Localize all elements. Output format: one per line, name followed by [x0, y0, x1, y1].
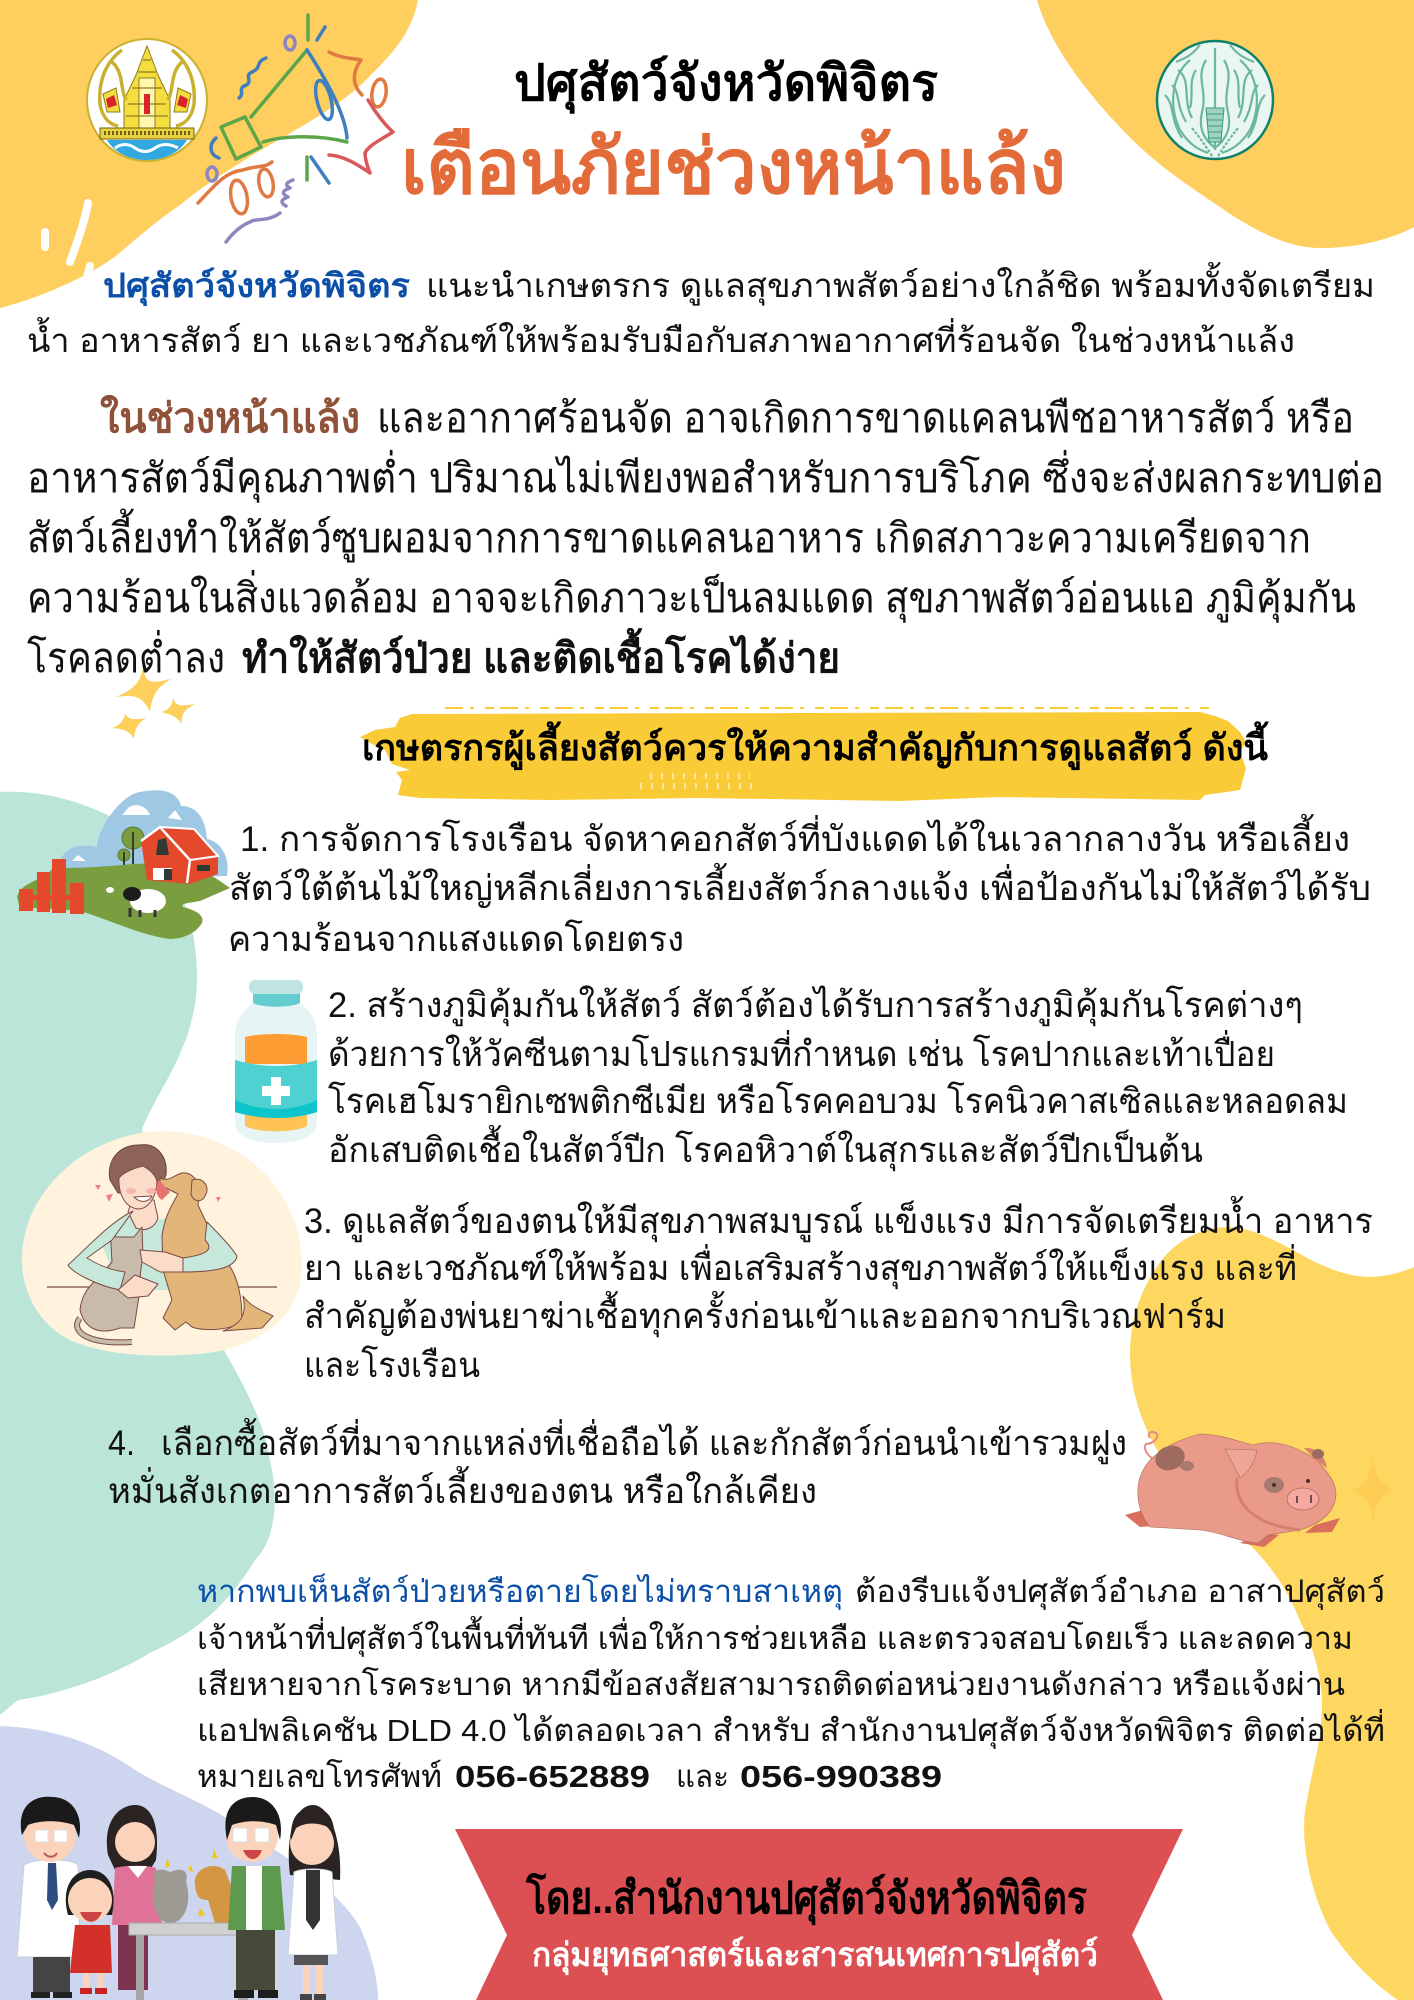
text block: item 2: โรคเฮโมรายิกเซพติกซีเมีย หรือโรคคอบวม โรคนิวคาสเซิลและหลอดลม	[328, 1081, 1348, 1121]
text block: item 1: 1. การจัดการโรงเรือน จัดหาคอกสัตว์ที่บังแดดได้ในเวลากลางวัน หรือเลี้ยง	[240, 813, 1350, 859]
icon: vaccine vial	[235, 980, 317, 1143]
text block: item 3: สำคัญต้องพ่นยาฆ่าเชื้อทุกครั้งก่อนเข้าและออกจากบริเวณฟาร์ม	[304, 1290, 1226, 1337]
background: left teal blob	[0, 792, 275, 1715]
table with cat and dog	[129, 1866, 261, 2000]
icon: provincial livestock office emblem	[1157, 41, 1273, 159]
text block: dry season effects: ทำให้สัตว์ป่วย และติดเชื้อโรคได้ง่าย	[242, 628, 840, 681]
text block: dry season effects: ในช่วงหน้าแล้ง	[100, 394, 360, 441]
illustration: farm with barn and sheep	[17, 790, 230, 939]
text block: intro paragraph	[27, 262, 1375, 359]
icon: sparkles	[112, 668, 195, 739]
doctor right	[288, 1805, 340, 2000]
text block: notice paragraph: 056-652889	[455, 1759, 650, 1794]
icon: faint sparkle	[1350, 1456, 1396, 1522]
text block: notice paragraph: และ	[676, 1759, 729, 1794]
text block: intro paragraph: แนะนำเกษตรกร ดูแลสุขภาพสัตว์อย่างใกล้ชิด พร้อมทั้งจัดเตรียม	[426, 262, 1375, 306]
icon: livestock department emblem	[87, 39, 207, 161]
text block: item 3: ยา และเวชภัณฑ์ให้พร้อม เพื่อเสริมสร้างสุขภาพสัตว์ให้แข็งแรง และที่	[304, 1244, 1297, 1289]
illustration: sick pig	[1125, 1432, 1340, 1547]
text block: item 2: 2. สร้างภูมิคุ้มกันให้สัตว์ สัตว์ต้องได้รับการสร้างภูมิคุ้มกันโรคต่างๆ	[328, 985, 1303, 1026]
text block: intro paragraph: น้ำ อาหารสัตว์ ยา และเวชภัณฑ์ให้พร้อมรับมือกับสภาพอากาศที่ร้อนจัด ในช่วงหน้าแล้ง	[27, 317, 1295, 359]
text block: item 4: เลือกซื้อสัตว์ที่มาจากแหล่งที่เชื่อถือได้ และกักสัตว์ก่อนนำเข้ารวมฝูง	[161, 1417, 1127, 1464]
text block: item 4: 4.	[108, 1424, 135, 1463]
text block: item 3: และโรงเรือน	[304, 1345, 480, 1385]
text block: item 3: 3. ดูแลสัตว์ของตนให้มีสุขภาพสมบูรณ์ แข็งแรง มีการจัดเตรียมน้ำ อาหาร	[304, 1195, 1373, 1242]
text block: notice paragraph: 056-990389	[740, 1759, 942, 1794]
doctor left	[17, 1797, 80, 1998]
text block: dry season effects	[27, 394, 1384, 681]
text block: item 1	[228, 813, 1371, 959]
child	[66, 1870, 114, 1994]
text block: notice paragraph: เสียหายจากโรคระบาด หากมีข้อสงสัยสามารถติดต่อหน่วยงานดังกล่าว หรือแจ้งผ่าน	[197, 1667, 1345, 1702]
man in green	[225, 1797, 285, 1998]
text block: item 1: สัตว์ใต้ต้นไม้ใหญ่หลีกเลี่ยงการเลี้ยงสัตว์กลางแจ้ง เพื่อป้องกันไม่ให้สัตว์ได้รับ	[229, 862, 1371, 908]
background: bottom-left lavender blob	[0, 1726, 378, 2000]
mother	[107, 1805, 162, 1990]
text block: dry season effects: โรคลดต่ำลง	[27, 630, 225, 681]
text block: intro paragraph: ปศุสัตว์จังหวัดพิจิตร	[103, 267, 410, 307]
text block: dry season effects: สัตว์เลี้ยงทำให้สัตว์ซูบผอมจากการขาดแคลนอาหาร เกิดสภาวะความเครียดจาก	[27, 508, 1311, 563]
text block: item 2: อักเสบติดเชื้อในสัตว์ปีก โรคอหิวาต์ในสุกรและสัตว์ปีกเป็นต้น	[328, 1124, 1203, 1171]
title: organisation: ปศุสัตว์จังหวัดพิจิตร	[514, 55, 938, 114]
background: top-right yellow blob	[1037, 0, 1414, 248]
text block: notice paragraph: ต้องรีบแจ้งปศุสัตว์อำเภอ อาสาปศุสัตว์	[855, 1574, 1385, 1611]
text block: item 4: หมั่นสังเกตอาการสัตว์เลี้ยงของตน หรือใกล้เคียง	[108, 1465, 817, 1511]
text block: dry season effects: ความร้อนในสิ่งแวดล้อม อาจจะเกิดภาวะเป็นลมแดด สุขภาพสัตว์อ่อนแอ ภูมิคุ้มกัน	[27, 570, 1356, 623]
text block: dry season effects: และอากาศร้อนจัด อาจเกิดการขาดแคลนพืชอาหารสัตว์ หรือ	[377, 395, 1354, 441]
illustration: person hugging cat and dog	[22, 1131, 302, 1356]
banner text: organisation: โดย..สำนักงานปศุสัตว์จังหวัดพิจิตร	[525, 1871, 1087, 1926]
text block: item 3	[304, 1195, 1373, 1385]
background: top-left yellow blob	[0, 0, 418, 308]
illustration: vets and family with pets	[17, 1797, 340, 2000]
banner text: division: กลุ่มยุทธศาสตร์และสารสนเทศการปศุสัตว์	[532, 1936, 1098, 1976]
text block: notice paragraph: แอปพลิเคชัน DLD 4.0 ได้ตลอดเวลา สำหรับ สำนักงานปศุสัตว์จังหวัดพิจิตร ติดต่อได้ที่	[197, 1709, 1385, 1750]
text block: notice paragraph: หากพบเห็นสัตว์ป่วยหรือตายโดยไม่ทราบสาเหตุ	[197, 1573, 843, 1611]
text block: notice paragraph	[197, 1573, 1385, 1794]
background: bottom-right yellow blob	[1130, 1227, 1414, 2000]
text block: item 2: ด้วยการให้วัคซีนตามโปรแกรมที่กำหนด เช่น โรคปากและเท้าเปื่อย	[328, 1030, 1275, 1074]
stars around pets	[165, 1850, 218, 1916]
decoration: white streaks on top-left blob	[45, 203, 90, 288]
text block: notice paragraph: เจ้าหน้าที่ปศุสัตว์ในพื้นที่ทันที เพื่อให้การช่วยเหลือ และตรวจสอบโดยเร็ว และลดความ	[197, 1616, 1353, 1658]
text block: item 2	[328, 985, 1348, 1171]
icon: megaphone doodle	[198, 15, 393, 242]
text block: item 4	[108, 1417, 1127, 1511]
text block: notice paragraph: หมายเลขโทรศัพท์	[197, 1759, 442, 1794]
text block: item 1: ความร้อนจากแสงแดดโดยตรง	[228, 919, 684, 959]
heading text: เกษตรกรผู้เลี้ยงสัตว์ควรให้ความสำคัญกับการดูแลสัตว์ ดังนี้	[362, 721, 1269, 771]
footer banner	[455, 1829, 1183, 2000]
heading band: yellow brush stroke	[360, 708, 1269, 801]
title: main headline: เตือนภัยช่วงหน้าแล้ง	[401, 125, 1066, 210]
